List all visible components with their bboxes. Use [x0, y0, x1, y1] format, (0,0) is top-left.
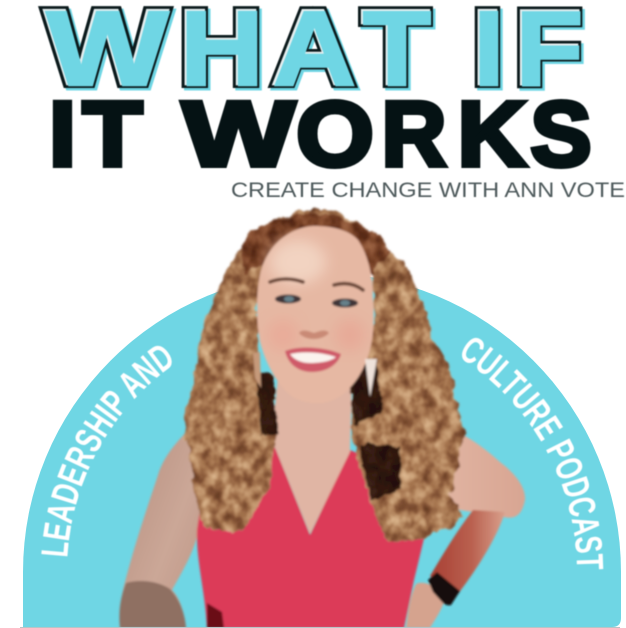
red dress	[197, 420, 428, 628]
person photo illustration	[119, 209, 525, 628]
nose shadow	[299, 331, 329, 339]
title line: IT WORKS: K	[458, 83, 526, 185]
bottom edge	[20, 627, 620, 628]
title line: WHAT IF	[45, 0, 584, 109]
arc text: LEADERSHIP AND: LEADERSHIP AND	[40, 345, 172, 557]
face	[257, 226, 374, 403]
left arm	[119, 420, 200, 628]
earrings	[253, 352, 377, 397]
cyan arch	[23, 273, 621, 627]
right arm and hand	[406, 425, 525, 628]
title line: IT WORKS: R	[382, 84, 446, 186]
eyes	[275, 294, 358, 308]
title line: IT WORKS: S	[530, 84, 592, 186]
title line: IT WORKS: T	[83, 83, 142, 186]
title line: IT WORKS: W	[182, 84, 296, 185]
neck and chest	[272, 375, 352, 534]
title line: IT WORKS: O	[296, 83, 374, 186]
subtitle: CREATE CHANGE WITH ANN VOTE	[231, 178, 625, 202]
arc text: CULTURE PODCAST: CULTURE PODCAST	[461, 337, 604, 570]
title line: IT WORKS	[49, 83, 592, 186]
smartwatch	[428, 572, 460, 605]
curly hair mass	[183, 209, 463, 541]
eyebrows	[270, 279, 363, 290]
mouth	[285, 347, 341, 372]
title line: IT WORKS: I	[49, 83, 76, 185]
